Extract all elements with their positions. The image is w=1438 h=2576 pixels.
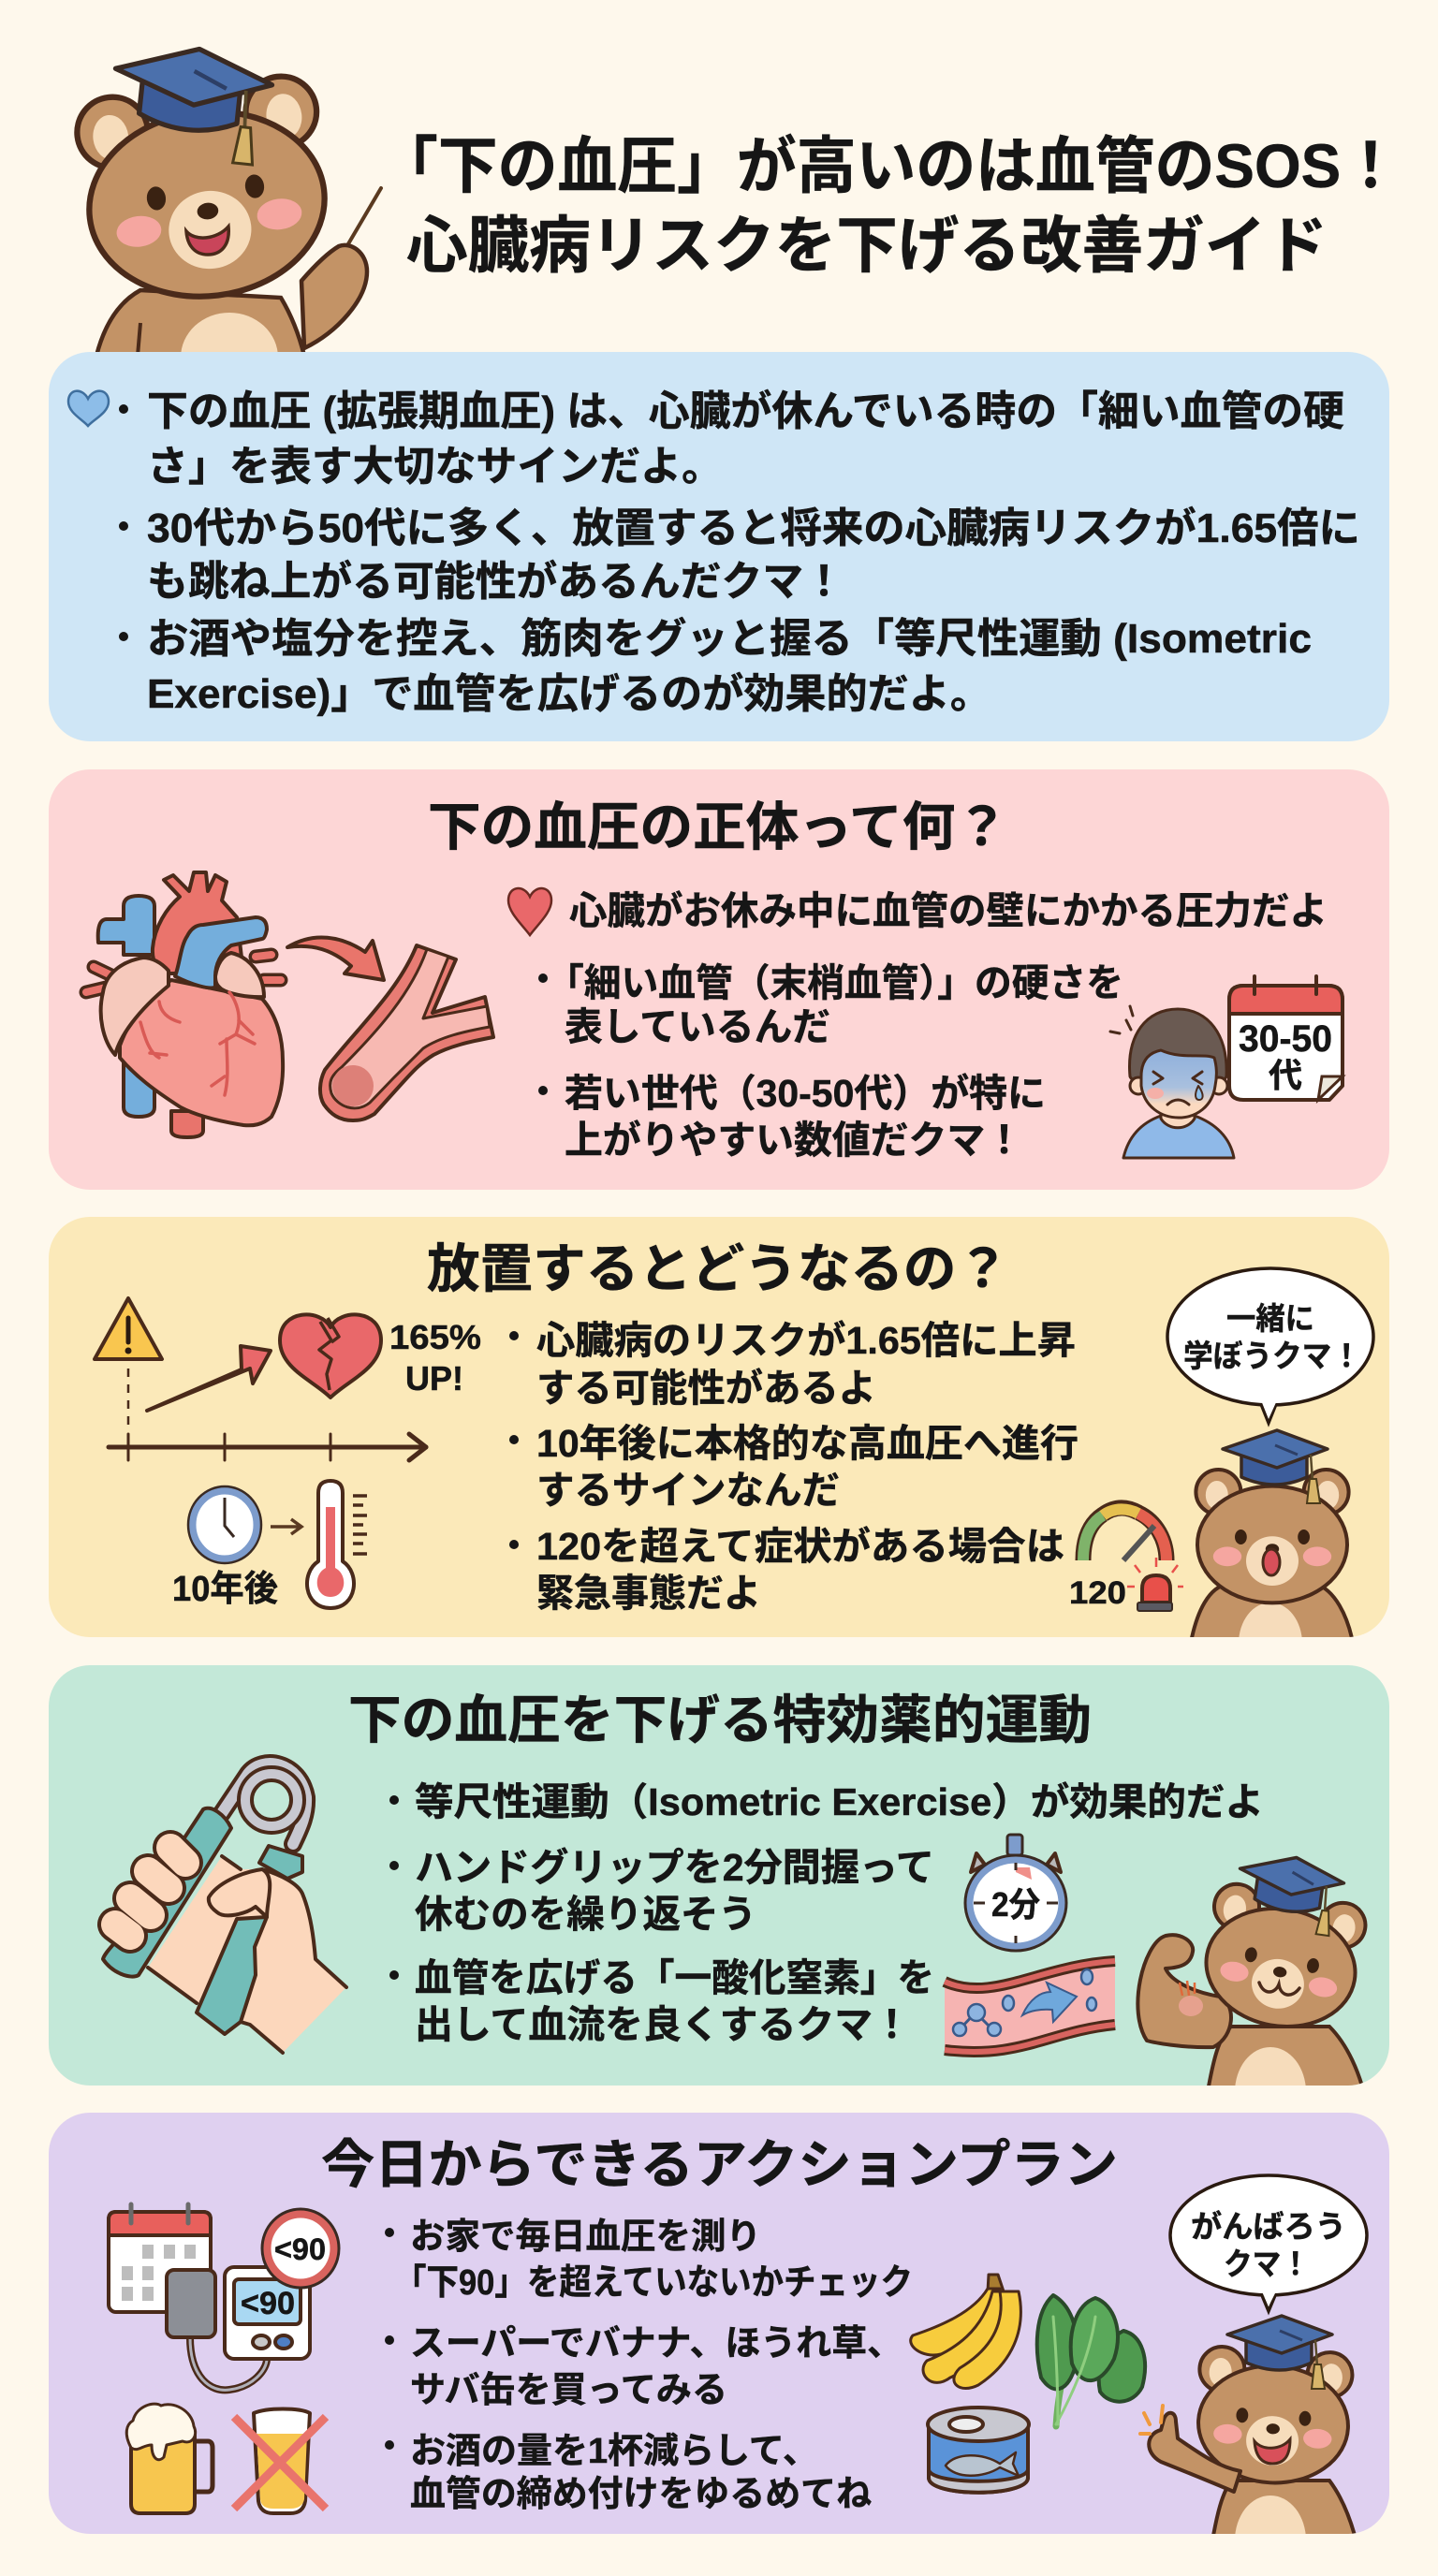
exercise text: 休むのを繰り返そう (415, 1893, 756, 1936)
summary bullets: お酒や塩分を控え、筋肉をグッと握る「等尺性運動 (Isometric (147, 616, 1312, 662)
action text: サバ缶を買ってみる (410, 2371, 727, 2410)
icon: calendar 30-50: 代 (1269, 1056, 1302, 1094)
icon: muscle marks (1180, 1981, 1195, 1996)
icon: blue heart (68, 391, 109, 426)
exercise text: ハンドグリップを2分間握って (415, 1846, 934, 1889)
exercise text: 出して血流を良くするクマ！ (415, 2003, 911, 2046)
speech bubble: let's learn (1167, 1268, 1373, 1423)
action text: お酒の量を1杯減らして、 (410, 2432, 818, 2471)
icon: beer mug (126, 2404, 213, 2513)
icon: stopwatch two minutes: 2分 (991, 1885, 1040, 1924)
speech bubble: let's learn: 一緒に (1226, 1301, 1314, 1336)
explanation text (538, 889, 1328, 1162)
exercise text: 等尺性運動（Isometric Exercise）が効果的だよ (415, 1780, 1264, 1823)
risk text (509, 1319, 1078, 1615)
icon: widened blood vessel with nitric oxide (945, 1958, 1115, 2052)
arrow: rising risk (147, 1346, 271, 1411)
speech bubble: let's do our best: クマ！ (1224, 2247, 1310, 2281)
icon: blood pressure monitor (167, 2267, 310, 2390)
summary bullets (119, 388, 1360, 717)
panel: if left untreated (49, 1217, 1389, 1637)
icon: hand gripper (103, 1764, 346, 2053)
risk text: 10年後に本格的な高血圧へ進行 (536, 1422, 1078, 1465)
heading: 放置するとどうなるの？ (427, 1239, 1009, 1298)
icon: thermometer (307, 1481, 367, 1608)
exercise text (389, 1780, 1264, 2046)
icon: crossed-out beer glass (234, 2409, 326, 2513)
speech bubble: let's do our best (1170, 2175, 1367, 2311)
panel: summary (49, 352, 1389, 741)
label: 165% up: 165% (389, 1318, 481, 1356)
action text: 血管の締め付けをゆるめてね (410, 2475, 872, 2514)
panel: what is diastolic pressure (49, 769, 1389, 1190)
label: 165% up: UP! (405, 1359, 463, 1398)
icon: anatomical heart (86, 872, 283, 1137)
mascot: flexing bear (1136, 1855, 1367, 2086)
risk text: するサインなんだ (536, 1469, 840, 1512)
risk text: 心臓病のリスクが1.65倍に上昇 (536, 1319, 1076, 1362)
title (378, 131, 1401, 280)
action text: お家で毎日血圧を測り (410, 2217, 761, 2257)
icon: gauge (1083, 1508, 1167, 1560)
arrow: heart to artery (287, 937, 384, 980)
risk text: 緊急事態だよ (536, 1572, 761, 1615)
icon: calendar 30-50: 30-50 (1239, 1018, 1332, 1060)
heading: 今日からできるアクションプラン (321, 2135, 1118, 2194)
icon: broken heart (280, 1314, 381, 1398)
action text: 「下90」を超えていないかチェック (394, 2263, 913, 2303)
icon: stopwatch two minutes (965, 1835, 1066, 1951)
speech bubble: let's learn: 学ぼうクマ！ (1183, 1339, 1361, 1373)
icon: limit sign under 90: <90 (274, 2232, 326, 2266)
summary bullets: さ」を表す大切なサインだよ。 (147, 444, 723, 490)
risk text: 120を超えて症状がある場合は (536, 1525, 1064, 1568)
chart: timeline axis (109, 1434, 426, 1460)
icon: warning triangle (95, 1298, 162, 1432)
summary bullets: Exercise)」で血管を広げるのが効果的だよ。 (147, 671, 991, 717)
explanation text: 「細い血管（末梢血管）」の硬さを (547, 961, 1123, 1004)
explanation text: 上がりやすい数値だクマ！ (565, 1119, 1023, 1162)
icon: calendar (109, 2204, 211, 2312)
heading: 下の血圧の正体って何？ (428, 798, 1008, 856)
icon: worried person (1110, 1006, 1234, 1158)
mascot: teacher bear with pointer (73, 40, 381, 402)
icon: artery (320, 945, 493, 1120)
title: 心臓病リスクを下げる改善ガイド (406, 211, 1328, 280)
panel: action plan (49, 2113, 1389, 2576)
icon: clock (188, 1486, 261, 1563)
label: 120: 120 (1069, 1575, 1126, 1611)
title: 「下の血圧」が高いのは血管のSOS！ (378, 131, 1401, 200)
risk text: する可能性があるよ (536, 1367, 876, 1410)
icon: calendar 30-50 (1229, 976, 1343, 1100)
icon: sparkle marks (1140, 2406, 1163, 2434)
action text (385, 2217, 913, 2514)
mascot: bear learning (1190, 1428, 1354, 1637)
icon: siren (1127, 1558, 1183, 1611)
icon: spinach (1037, 2295, 1145, 2426)
icon: limit sign under 90 (262, 2209, 339, 2288)
summary bullets: 下の血圧 (拡張期血圧) は、心臓が休んでいる時の「細い血管の硬 (147, 388, 1344, 434)
heading: 下の血圧を下げる特効薬的運動 (348, 1690, 1092, 1749)
icon: red heart (508, 888, 551, 935)
icon: bananas (911, 2275, 1020, 2389)
icon: blood pressure monitor: <90 (241, 2286, 295, 2321)
action text: スーパーでバナナ、ほうれ草、 (410, 2324, 902, 2364)
explanation text: 心臓がお休み中に血管の壁にかかる圧力だよ (569, 889, 1328, 932)
explanation text: 表しているんだ (565, 1005, 830, 1048)
speech bubble: let's do our best: がんばろう (1191, 2209, 1346, 2244)
label: 165% up (389, 1318, 481, 1398)
icon: mackerel can (928, 2408, 1029, 2493)
label: ten years later: 10年後 (172, 1570, 278, 1609)
summary bullets: 30代から50代に多く、放置すると将来の心臓病リスクが1.65倍に (147, 505, 1360, 551)
panel: isometric exercise (49, 1665, 1389, 2086)
exercise text: 血管を広げる「一酸化窒素」を (415, 1956, 934, 1999)
summary bullets: も跳ね上がる可能性があるんだクマ！ (147, 559, 844, 605)
mascot: thumbs-up bear (1147, 2314, 1356, 2534)
explanation text: 若い世代（30-50代）が特に (565, 1072, 1046, 1115)
arrow: clock to thermometer (271, 1519, 301, 1534)
